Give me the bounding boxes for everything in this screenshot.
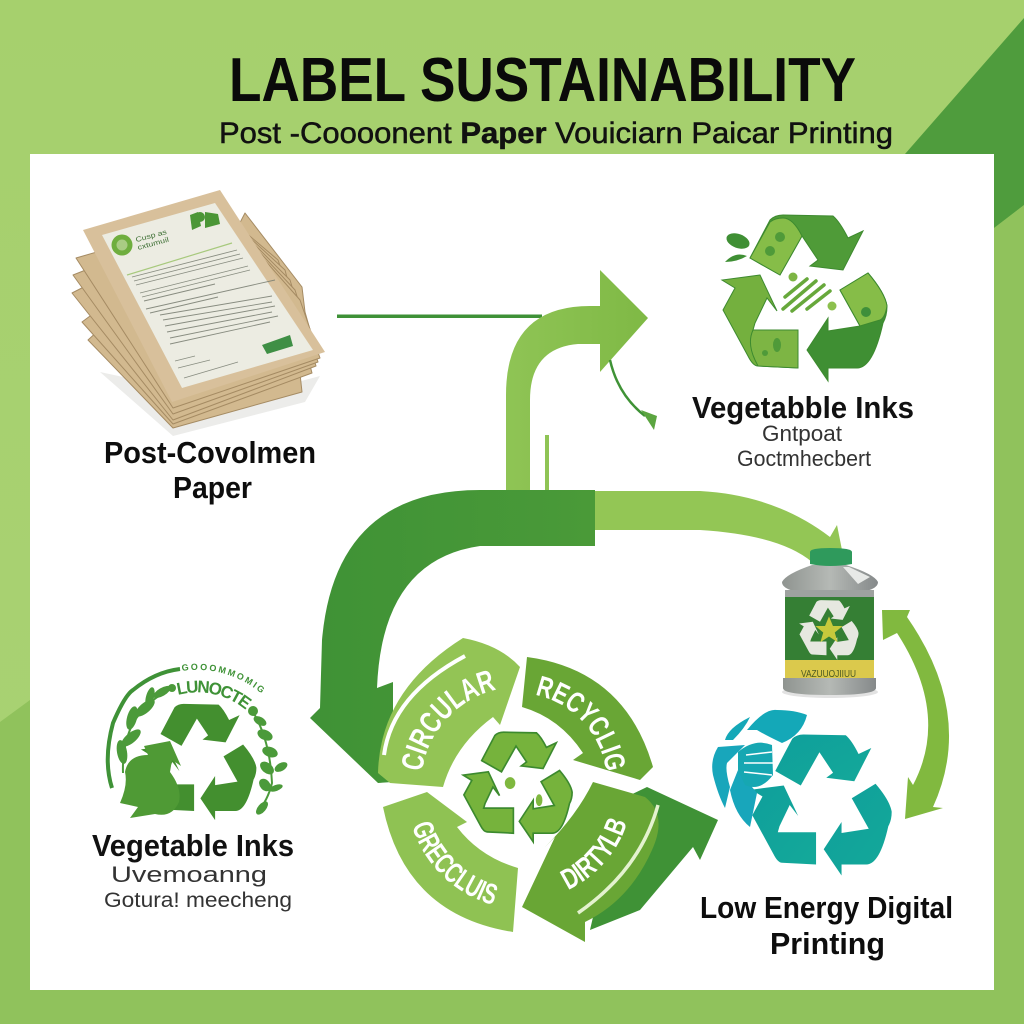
arrow: small curved dark — [610, 360, 657, 430]
label: post-consumer paper — [104, 435, 316, 505]
outer arc — [108, 669, 180, 788]
label: low energy digital printing — [700, 890, 953, 961]
teal wrist — [712, 745, 745, 808]
bottle cap — [810, 548, 852, 566]
label: vegetable inks bottom left: Uvemoanng — [111, 862, 267, 887]
laurel right — [248, 706, 289, 817]
arrow: double-headed right — [882, 610, 949, 819]
teal fist — [738, 743, 774, 787]
logo text: cxtumuil — [137, 237, 170, 252]
small teal leaf — [725, 717, 750, 740]
stripes — [783, 279, 830, 311]
segment: recycling — [522, 657, 653, 780]
label: vegetable inks bottom left — [92, 828, 294, 912]
big teal leaf — [747, 710, 807, 743]
icon: recycling emblem bottom left: LUNOCTE — [176, 680, 252, 710]
icon: recycling emblem bottom left — [106, 664, 288, 820]
segment: dirtylb: DIRTYLB — [560, 818, 626, 890]
small recycling logo — [190, 212, 220, 230]
leaf blob — [120, 741, 181, 818]
arrow: light green up-bend — [506, 270, 648, 492]
icon: ink bottle — [782, 548, 878, 698]
thin connector line — [337, 314, 542, 318]
icon: ink bottle: VAZUUOJIIUU — [801, 669, 856, 680]
arrow: light green to bottle — [590, 491, 842, 562]
icon: center recycling — [463, 732, 572, 842]
label: vegetable inks top — [692, 390, 914, 471]
segment: greccluis: GRECCLUIS — [414, 822, 498, 904]
icon: paper stack — [72, 190, 325, 436]
icon: recycling symbol top right — [722, 215, 887, 381]
logo text: Cusp as — [135, 229, 168, 244]
label: vegetable inks top: Goctmhecbert — [737, 446, 871, 471]
label: vegetable inks top: Vegetabble Inks — [692, 390, 914, 425]
document card — [102, 203, 313, 388]
top sheet — [83, 190, 325, 402]
segment: recycling: RECYCLIG — [536, 676, 625, 770]
title: LABEL SUSTAINABILITY — [229, 46, 856, 115]
logo text — [135, 229, 170, 252]
leaf — [724, 230, 752, 252]
label: vegetable inks bottom left: Gotura! meecheng — [104, 889, 292, 912]
label: low energy digital printing: Printing — [770, 926, 885, 961]
curved emblem text: GOOOMMOMIG — [182, 664, 264, 692]
label: low energy digital printing: Low Energy Digital — [700, 890, 953, 925]
laurel left — [115, 684, 176, 773]
icon: teal recycling with hand and leaf — [712, 710, 892, 876]
arrow: big dark curving to cycle — [310, 490, 595, 783]
segment: circular: CIRCULAR — [402, 670, 496, 770]
label: post-consumer paper: Paper — [173, 470, 252, 505]
logo circle — [112, 234, 132, 256]
teal forearm — [730, 770, 757, 827]
thin vertical line — [545, 435, 549, 491]
subtitle: Post -Coooonent Paper Vouiciarn Paicar Printing — [219, 117, 893, 150]
panel: main white panel — [30, 154, 994, 990]
white recycling mark — [799, 600, 859, 660]
segment: dirtylb — [522, 782, 660, 942]
segment: greccluis — [383, 792, 518, 932]
arrow: dark to teal icon — [590, 787, 718, 930]
document lines — [127, 243, 278, 378]
barcode — [262, 335, 293, 354]
segment: circular — [378, 638, 520, 787]
label: post-consumer paper: Post-Covolmen — [104, 435, 316, 470]
chart: circular cycle — [378, 638, 718, 942]
label: vegetable inks top: Gntpoat — [762, 421, 842, 446]
label: vegetable inks bottom left: Vegetable Inks — [92, 828, 294, 863]
